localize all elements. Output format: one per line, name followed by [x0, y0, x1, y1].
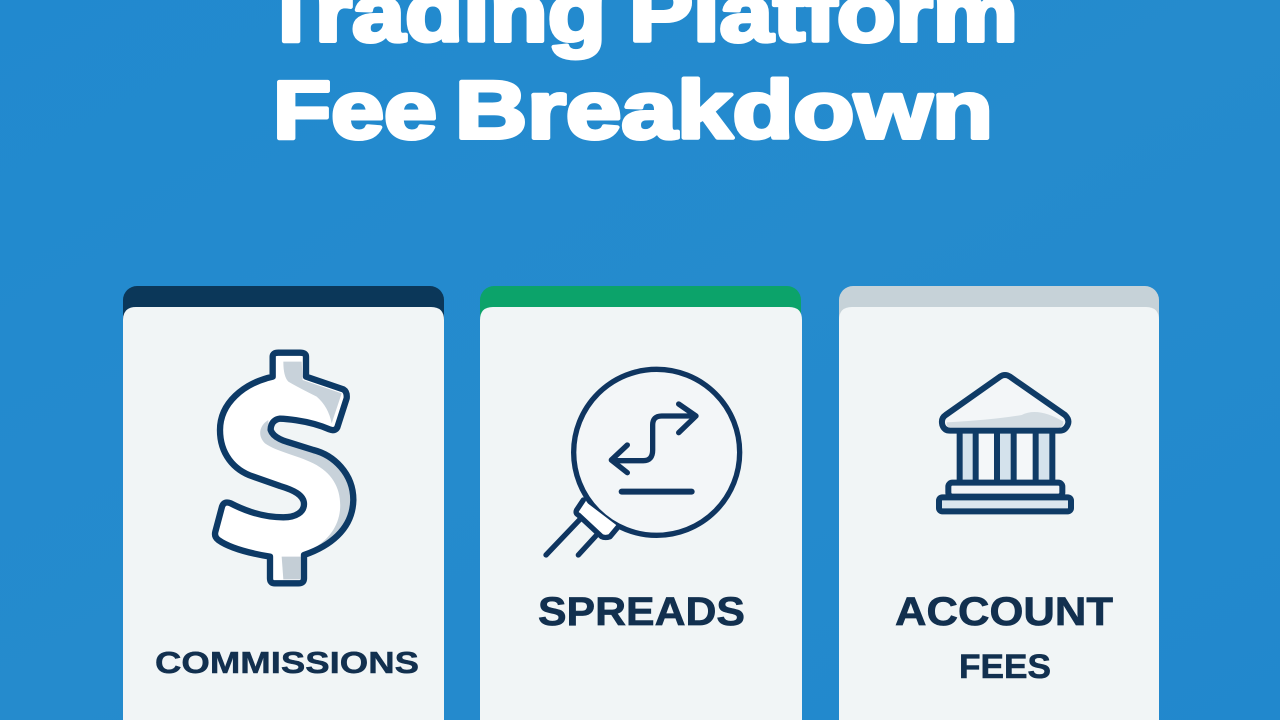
label: commissions: COMMISSIONS — [155, 645, 419, 680]
title — [262, 0, 1018, 156]
icon: bank building — [939, 375, 1071, 511]
panel: account fees — [839, 286, 1159, 720]
panel: spreads — [480, 286, 802, 720]
title: Fee — [273, 65, 437, 156]
label: fees: FEES — [959, 648, 1051, 686]
panel: commissions — [123, 286, 444, 720]
title: Breakdown — [455, 65, 993, 156]
label: account: ACCOUNT — [895, 590, 1113, 634]
icon: magnifying glass with arrows — [546, 369, 740, 555]
label: spreads: SPREADS — [538, 590, 745, 634]
icon: dollar sign — [215, 353, 353, 583]
